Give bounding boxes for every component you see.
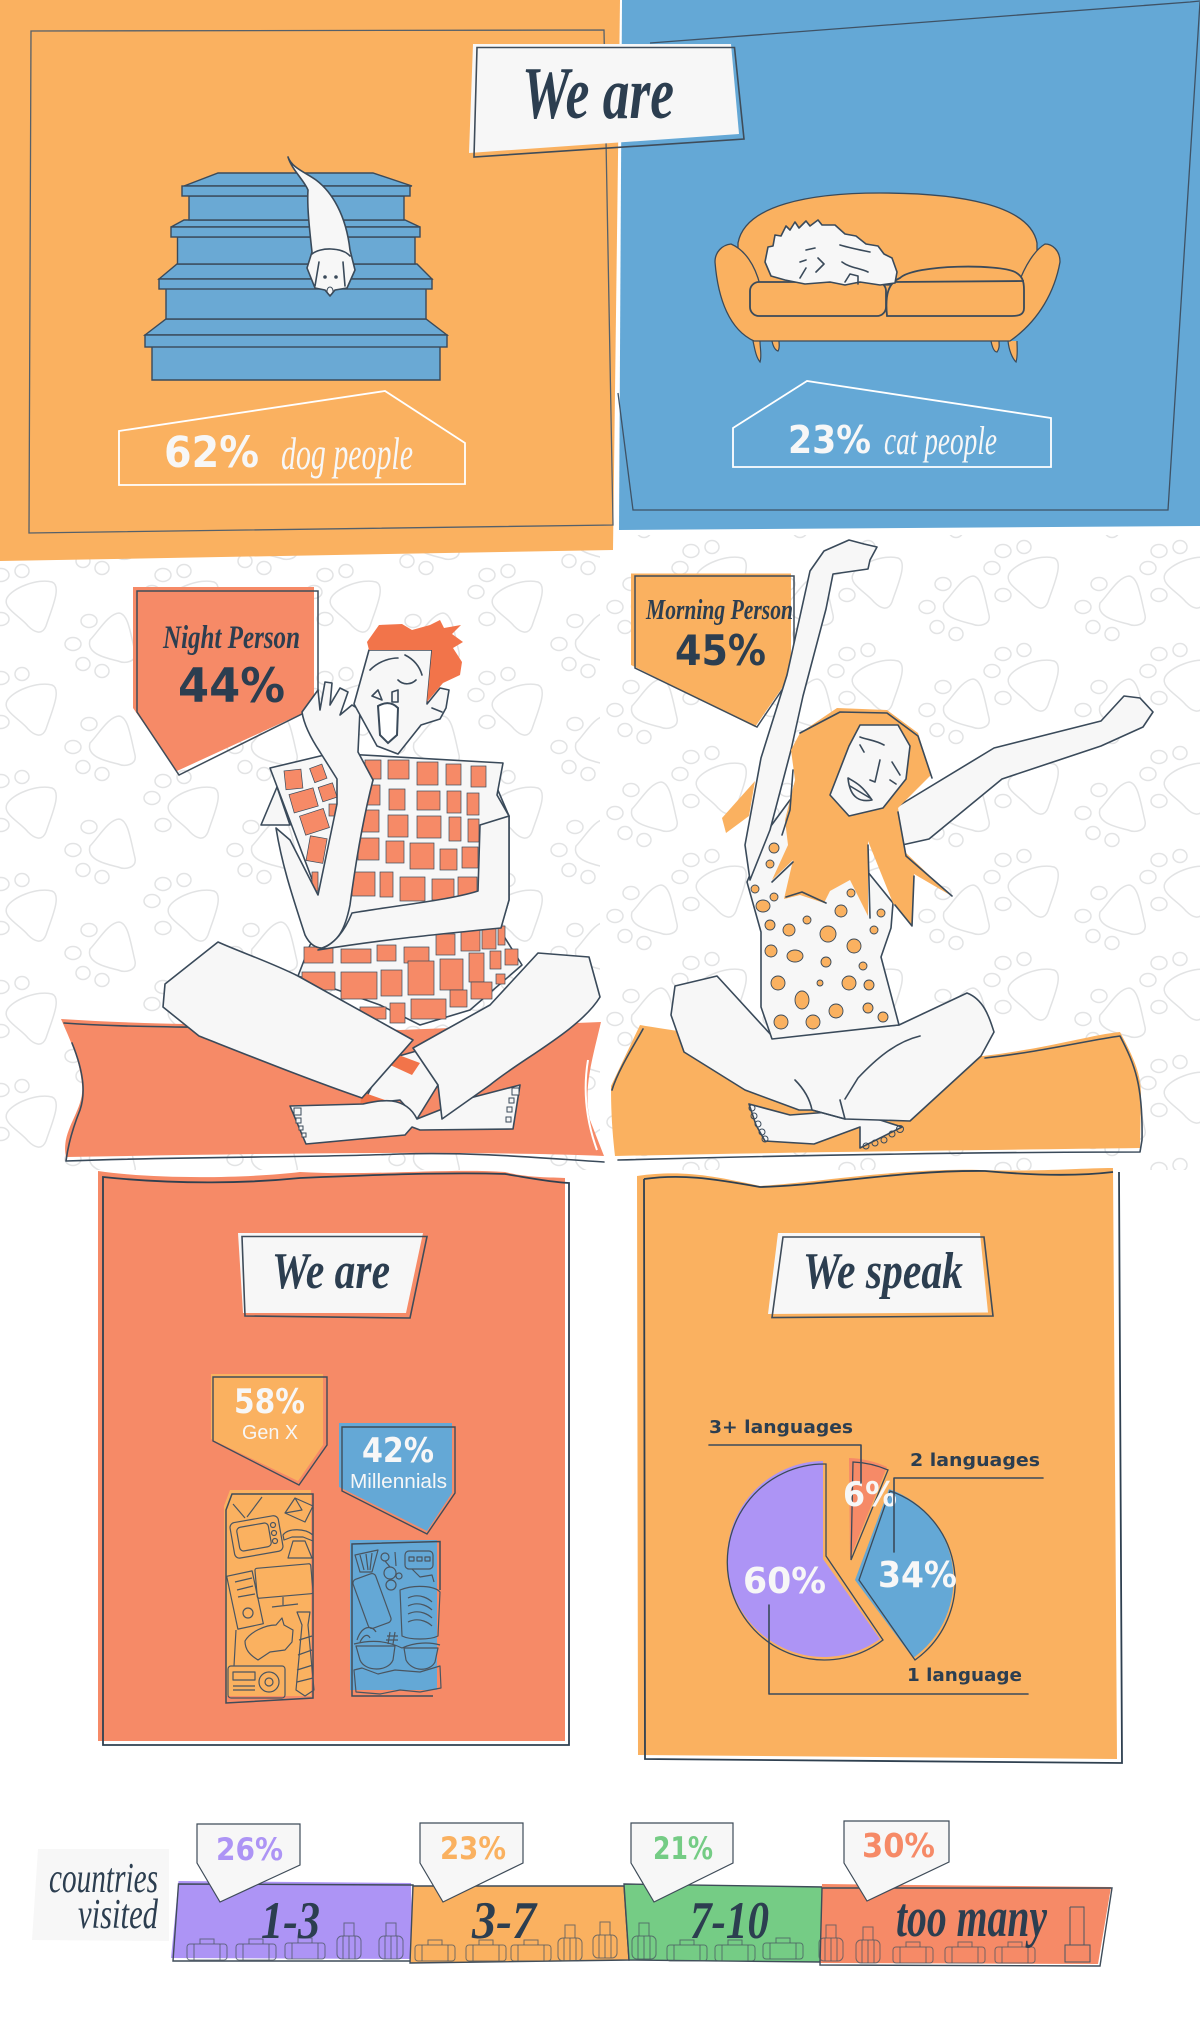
callout: 42% Millennials: 42% (362, 1431, 434, 1471)
band: too many countries (819, 1884, 1112, 1966)
band: 1-3 countries: 1-3 (261, 1892, 320, 1950)
coral mattress (61, 1019, 604, 1162)
man crossed legs and feet (163, 942, 600, 1144)
category leader lines (709, 1417, 1043, 1694)
value labels (743, 1475, 957, 1602)
woman face (830, 725, 910, 816)
callout: 23%: 23% (440, 1831, 506, 1867)
pillow with plaid under the arm (270, 752, 373, 895)
polka-dot top (747, 800, 899, 1039)
callout: 42% Millennials (339, 1423, 455, 1534)
callout: 58% Gen X: 58% (234, 1382, 305, 1422)
callout: 26% (197, 1824, 300, 1902)
icon: dog coming down the stairs (288, 157, 355, 296)
panel: dog people (0, 0, 620, 561)
callout: 62% dog people: 62% (164, 428, 259, 478)
left strand of hair (722, 781, 755, 833)
label: countries visited (32, 1849, 169, 1941)
panel: countries visited (32, 1821, 1112, 1966)
label: countries visited: visited (78, 1892, 159, 1938)
plaid shirt squares (302, 760, 518, 1023)
panel: morning person illustration (611, 540, 1153, 1160)
panel: generations (98, 1171, 569, 1745)
man arm and hand (276, 682, 373, 948)
woman stretching (671, 540, 1153, 1149)
callout: 42% Millennials: Millennials (350, 1471, 447, 1493)
panel: night person illustration (61, 587, 604, 1162)
callout: 23% (420, 1823, 523, 1902)
band: 7-10 countries: 7-10 (690, 1892, 769, 1950)
band: too many countries: too many (896, 1887, 1048, 1949)
title: We are: We are (522, 53, 674, 135)
callout: 30% (844, 1821, 949, 1901)
callout: Morning Person 45%: 45% (675, 626, 766, 675)
callout: 23% cat people: cat people (884, 418, 997, 463)
background paw pattern (0, 535, 1200, 1170)
category leader lines: 3+ languages (709, 1417, 853, 1438)
heading: We speak: We speak (803, 1243, 963, 1300)
value labels: 60% (743, 1561, 826, 1602)
callout: 26%: 26% (216, 1832, 283, 1868)
raised and outstretched arms (745, 540, 877, 880)
callout: Night Person 44%: 44% (178, 659, 285, 714)
callout: Night Person 44%: Night Person (162, 620, 300, 656)
callout: 21%: 21% (653, 1831, 713, 1867)
value labels: 34% (878, 1555, 957, 1596)
heading: We speak (768, 1233, 993, 1318)
callout: Morning Person 45% (631, 574, 794, 727)
man head (354, 620, 463, 754)
panel: cat people (618, 0, 1200, 530)
callout: 23% cat people: 23% (788, 418, 871, 462)
icon: fluffy cat (765, 220, 897, 285)
band: 3-7 countries: 3-7 (471, 1892, 538, 1950)
woman crossed legs and feet (671, 976, 994, 1149)
title: We are (469, 44, 744, 157)
bar: Gen X icons (224, 1490, 314, 1703)
band: 7-10 countries (624, 1884, 824, 1962)
icon: orange sofa (715, 193, 1060, 362)
callout: 23% cat people (733, 381, 1051, 467)
band: 1-3 countries (171, 1881, 413, 1961)
category leader lines: 1 language (907, 1665, 1022, 1686)
polka dots on top (751, 843, 888, 1029)
panel: languages (637, 1168, 1122, 1763)
category leader lines: 2 languages (910, 1450, 1040, 1471)
heading: We are (238, 1233, 427, 1318)
callout: 58% Gen X (211, 1374, 327, 1485)
orange mattress (611, 1025, 1142, 1160)
callout: 62% dog people (119, 391, 465, 485)
bar: Millennials icons (350, 1540, 441, 1696)
callout: 58% Gen X: Gen X (242, 1422, 298, 1444)
heading: We are: We are (272, 1243, 390, 1300)
orange hair (772, 708, 952, 926)
man yawning (163, 620, 600, 1144)
label: countries visited: countries (49, 1856, 158, 1902)
icon: blue staircase (145, 173, 447, 380)
callout: 30%: 30% (862, 1826, 935, 1865)
callout: 62% dog people: dog people (281, 428, 413, 479)
band: 3-7 countries (410, 1886, 629, 1963)
pie chart (709, 1417, 1043, 1694)
callout: Morning Person 45%: Morning Person (645, 594, 793, 626)
man other arm (318, 816, 509, 950)
callout: Night Person 44% (133, 587, 318, 775)
callout: 21% (631, 1823, 733, 1902)
value labels: 6% (843, 1475, 897, 1515)
